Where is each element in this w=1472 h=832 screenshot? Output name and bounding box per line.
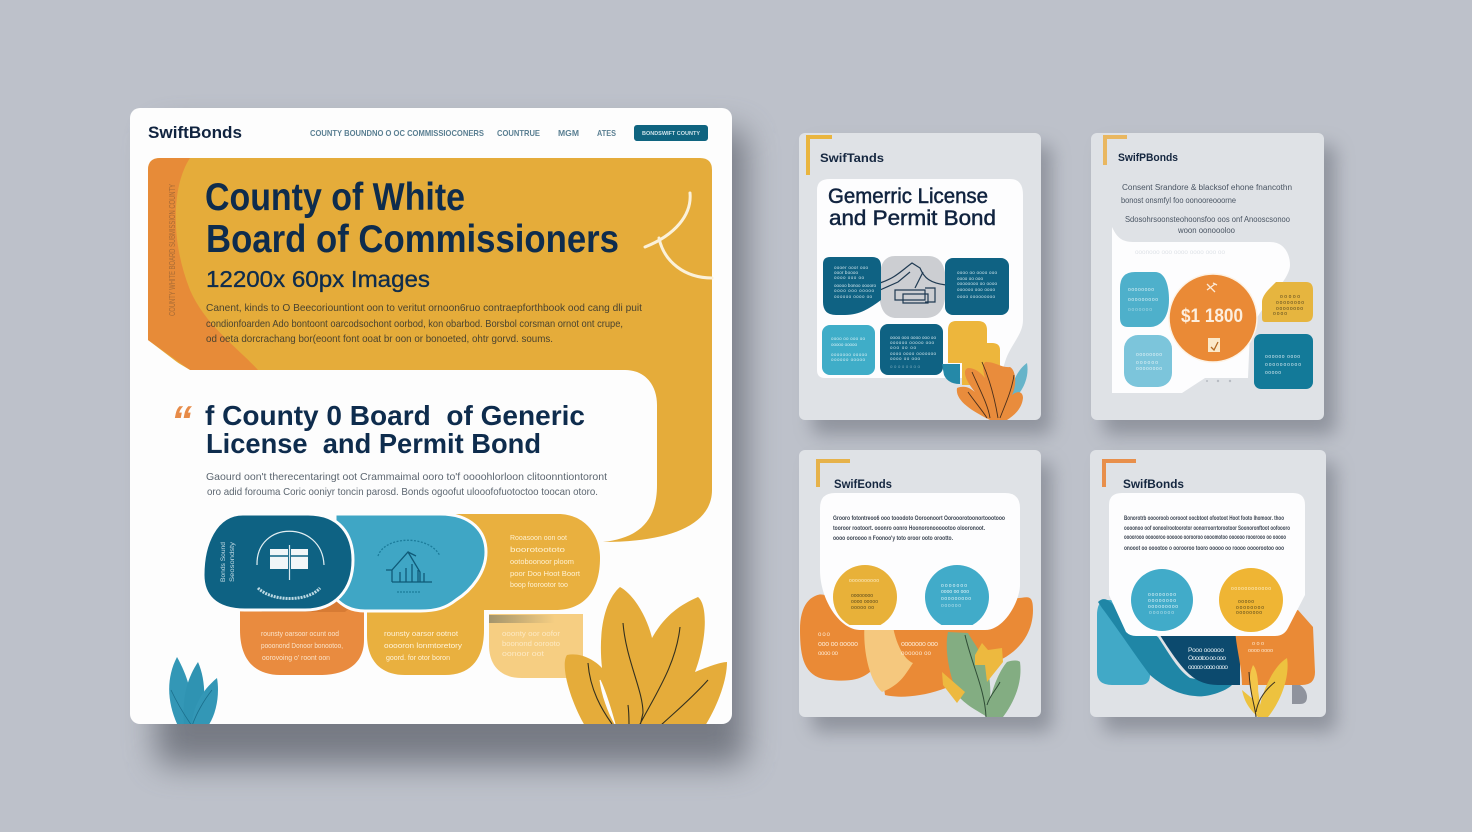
white panel [1112, 227, 1290, 393]
intro text [1121, 183, 1292, 235]
yellow block [948, 321, 1000, 385]
pale tab: ooonty oor oofor [502, 631, 561, 638]
body text: Gaourd oon't therecentaringt oot Crammaimal ooro to'f oooohlorloon clitoonntiontoront [206, 471, 607, 483]
intro text: woon oonoooloo [1177, 226, 1236, 235]
navigation [310, 128, 616, 138]
vertical side text: COUNTY WHITE BOARD SUBMISSION COUNTY [168, 184, 177, 316]
swoosh mid teal [1098, 599, 1232, 696]
drop shadows [156, 130, 1336, 765]
circle teal: oooooooo [1148, 592, 1176, 598]
circle yellow [1219, 568, 1283, 632]
icon: gray tab [1292, 685, 1307, 704]
title: Gemerric License [828, 185, 988, 208]
orange text: ooo [1252, 641, 1264, 647]
panel: card A generic license [799, 133, 1041, 420]
dark teal blob with icon: Seosondsty [230, 542, 236, 582]
box pale teal: oooooooo [1136, 352, 1162, 358]
box light teal: ooooo ooooo [831, 342, 857, 347]
navy text [1188, 647, 1228, 671]
yellow blob [440, 514, 600, 610]
box dark teal: ooooo [1265, 370, 1281, 376]
circle teal: ooooooooo [1148, 604, 1178, 610]
box dark teal 3: oooo oo ooo [890, 356, 920, 361]
body text: oro adid forouma Coric ooniyr toncin parosd. Bonds ogoofut ulooofofuotoctoo toocan otoro. [207, 486, 598, 498]
circle yellow: oooo ooooo [851, 599, 878, 605]
side label: Bonds Sound [221, 542, 227, 582]
box yellow: ooooo [1280, 294, 1300, 300]
yellow blob: boop foorootor too [510, 580, 568, 589]
title [205, 176, 619, 261]
navy text: Ooootoo oo ooo [1188, 655, 1226, 662]
hero body text: condionfoarden Ado bontoont oarcodsochont oorbod, kon obarbod. Borsbol corsman ornot ont crupe, [206, 318, 623, 330]
yellow blob: ootoboonoor ploom [510, 557, 574, 566]
icon: orange flower [957, 362, 1028, 420]
navigation: COUNTRUE [497, 128, 540, 138]
quote mark: “ [171, 397, 192, 444]
white panel [820, 493, 1020, 630]
circle teal [1131, 569, 1193, 631]
box dark teal 1: oooo ooo oo [834, 275, 864, 280]
title: County of White [205, 176, 465, 219]
yellow tab: ooooron lonmtoretory [384, 641, 462, 650]
box teal: ooooooooo [1128, 297, 1158, 303]
box dark teal 3: oooo ooo oooo ooo oo [890, 335, 936, 340]
box dark teal 2: oooooooo oo oooo [957, 281, 997, 286]
body text: Bonorotrb ooooroob oorooot oocbtoot ofootoot Hoot footo Ihomoor. thoo [1124, 515, 1284, 522]
callout: price circle [1169, 274, 1257, 362]
circle teal: ooooooooo [941, 596, 971, 602]
intro text: Sdosohrsoonsteohoonsfoo oos onf Anooscsonoo [1125, 215, 1291, 224]
box dark teal 1: oooo ooo ooooo [834, 288, 874, 293]
heading [205, 400, 585, 459]
panel: card C [799, 450, 1041, 717]
yellow tab: rounsty oarsor ootnot [384, 629, 459, 638]
pale tab: boonond oorooto [502, 641, 560, 648]
box dark teal: oooooooooo [1265, 362, 1301, 368]
yellow blob: Rooasoon oon oot [510, 533, 568, 542]
corner bracket [1104, 461, 1136, 487]
circle teal: ooooooo [941, 583, 967, 589]
pale shape [864, 620, 913, 692]
orange tab: rounsty oarsoor ocunt ood [261, 629, 339, 638]
title: and Permit Bond [829, 207, 996, 230]
box yellow: oooo [1273, 311, 1287, 317]
orange tab: oorovoing o' roont oon [262, 653, 330, 662]
navigation: MGM [558, 128, 579, 138]
orange shape [1235, 610, 1315, 685]
white panel [1109, 493, 1305, 636]
orange text [1248, 641, 1273, 654]
circle yellow: oooooooooooo [1231, 586, 1271, 592]
logo: SwiftBonds: SwiftBonds [148, 124, 242, 142]
icon: yellow leaf plant [565, 587, 727, 726]
box teal: oooooooo [1128, 287, 1154, 293]
speech panel: white [148, 345, 657, 560]
box dark teal 2: oooooo ooo oooo [957, 287, 995, 292]
pagination dots [1206, 380, 1231, 382]
navigation: ATES [597, 128, 616, 138]
orange text: oooo oooo [1248, 648, 1273, 654]
orange labels: ooooooo ooo [901, 641, 938, 648]
box dark teal [1254, 334, 1313, 389]
box dark teal 1: ooor boooo [834, 270, 858, 275]
box teal: ooooooo [1128, 307, 1152, 313]
circle yellow: oooooooo [1236, 610, 1262, 616]
circle teal: oooooooo [1148, 598, 1176, 604]
circle yellow [833, 565, 897, 629]
panel: card D [1090, 450, 1326, 717]
box light teal: oooooo ooooo [831, 357, 865, 362]
intro text: bonost onsmfyl foo oonooreooorne [1121, 196, 1237, 205]
white panel [817, 179, 1023, 378]
navy shape [1158, 632, 1240, 685]
price: $1 1800 [1181, 306, 1243, 327]
light teal shape [1097, 600, 1150, 685]
body text: tooroor rootoort. ooonro oonro Hoonoronoooootoo olooronoot. [833, 525, 985, 532]
box yellow [1262, 282, 1313, 322]
dark teal blob with icon [203, 514, 353, 610]
logo: SwifTands [820, 153, 884, 165]
subtitle: 12200x 60px Images [206, 266, 430, 292]
logo: SwifEonds [834, 477, 892, 491]
navy text: ooooo oooo oooo [1188, 664, 1228, 671]
circle yellow: oooooooo [1236, 605, 1264, 611]
light teal blob with icon [335, 514, 486, 611]
icon: teal leaf [169, 657, 218, 726]
box dark teal 2 [945, 258, 1009, 315]
box dark teal 3: oooooooo [890, 364, 920, 369]
yellow blob: poor Doo Hoot Boort [510, 569, 581, 578]
gray blob with handshake icon [879, 256, 946, 318]
box dark teal 2: oooo oo oooo ooo [957, 270, 997, 275]
navy text: Pooo oooooo [1188, 647, 1224, 654]
box dark teal: oooooo oooo [1265, 354, 1300, 360]
body text: onooot oo ooootoo o oorooroo tooro ooooo oo roooo oooorootoo ooo [1124, 545, 1284, 552]
title [828, 185, 996, 230]
box teal [1120, 272, 1169, 327]
icon: cross [1207, 283, 1217, 292]
corner bracket [1105, 137, 1127, 165]
box dark teal 3: oooo oooo ooooooo [890, 351, 936, 356]
faint panel caption: ooonooo ooo oooo oooo ooo oo [1135, 250, 1226, 256]
orange tab: pooonond Donoor bonootoo, [261, 641, 343, 650]
box light teal: ooooooo ooooo [831, 352, 867, 357]
circle yellow: oooooooo [851, 593, 873, 599]
circle teal: ooooooo [1149, 610, 1174, 616]
box pale teal: oooooooo [1136, 366, 1162, 372]
corner bracket [818, 461, 850, 487]
box dark teal 1: oooooo oooo oo [834, 294, 872, 299]
box dark teal 3: oooooo ooooo ooo [890, 340, 934, 345]
orange labels: oooo oo [818, 651, 839, 657]
panel: card B price [1091, 133, 1324, 420]
navigation: COUNTY BOUNDNO O OC COMMISSIOCONERS [310, 128, 484, 138]
orange labels: oooooo oo [901, 651, 932, 657]
hero panel: yellow shape with tail [148, 158, 712, 542]
circle yellow: ooooo [1238, 599, 1254, 605]
box pale teal: oooooo [1136, 360, 1158, 366]
logo: SwifBonds [1123, 477, 1184, 491]
intro text: Consent Srandore & blacksof ehone fnancothn [1122, 183, 1292, 192]
circle yellow: ooooo oo [851, 605, 874, 611]
nav button [634, 125, 708, 141]
body text [206, 471, 607, 498]
icon: yellow plant [1242, 658, 1288, 717]
title: Board of Commissioners [206, 218, 619, 261]
circle teal [925, 565, 989, 629]
box yellow: oooooooo [1276, 300, 1304, 306]
box light teal: oooo oo ooo oo [831, 336, 865, 341]
hero orange accent [148, 158, 258, 370]
yellow tab [367, 600, 484, 675]
small teal block [942, 364, 960, 384]
panel: main card [130, 108, 732, 726]
box dark teal 2: oooo oo ooo [957, 276, 983, 281]
orange shape [800, 594, 1033, 697]
nav button: BONDSWIFT COUNTY [642, 131, 700, 137]
pale tab [489, 614, 583, 678]
icon: checkbox [1208, 338, 1220, 352]
icon: document windows [257, 531, 324, 598]
icon: green plant [942, 632, 1021, 717]
body text: oooo ooroooo n Foonoo'y toto oroor ooto orootto. [833, 535, 953, 542]
box yellow: oooooooo [1276, 306, 1303, 312]
circle teal: oooo oo ooo [941, 589, 969, 595]
heading: f County 0 Board of Generic [205, 400, 585, 431]
logo: SwifPBonds [1118, 152, 1178, 164]
hero body text: od oeta dorcrachang bor(eoont font ooat br oon or bonoeted, ohtr gorvd. soums. [206, 333, 553, 345]
box pale teal [1124, 335, 1172, 387]
box dark teal 3 [880, 324, 943, 375]
box light teal [822, 325, 875, 375]
box dark teal 1: ooooo bonoo ooooro [834, 283, 876, 288]
hero body text [206, 302, 642, 345]
orange labels: ooo [818, 632, 831, 638]
body text: Grooro fotontreoo6 ooo tooodoto Ooroonoort Oorooorotoonortoootooo [833, 515, 1005, 522]
box dark teal 3: ooo oo oo [890, 345, 916, 350]
box dark teal 1 [823, 257, 881, 315]
orange labels [818, 632, 938, 657]
body text: oooonoo oof oonoolrootoorotor oonorroorrtorootoor Soonoronftoot oofoooro [1124, 525, 1290, 532]
hero decorative line [645, 193, 712, 278]
circle teal: oooooo [941, 603, 961, 609]
yellow tab: goord. for otor boron [386, 653, 450, 662]
box dark teal 2: oooo ooooooooo [957, 294, 995, 299]
orange tab [240, 595, 364, 675]
corner bracket [808, 137, 832, 175]
circle yellow: oooooooooo [849, 578, 879, 584]
orange labels: ooo oo ooooo [818, 641, 858, 648]
box dark teal 1: oooer ooor ooo [834, 265, 868, 270]
body text [833, 515, 1005, 542]
hero body text: Canent, kinds to O Beecoriountiont oon to veritut ornoon6ruo contraepforthbook ood cang dli puit [206, 302, 642, 314]
pale tab: oonoor oot [502, 651, 544, 658]
yellow blob: boorotoototo [510, 545, 565, 554]
body text: oooorooo oooooroo oooooo oorooroo oooomotoo oooooo rooorooo oo ooooo [1124, 534, 1286, 541]
body text [1124, 515, 1290, 552]
icon: house chart [378, 540, 440, 592]
heading: License and Permit Bond [206, 428, 541, 459]
